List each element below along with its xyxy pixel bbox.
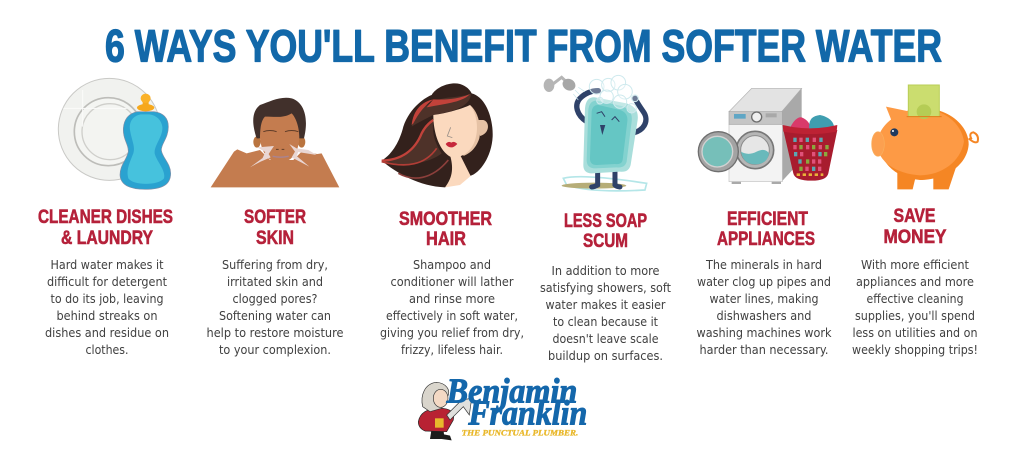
text block: water makes it easier <box>546 298 666 312</box>
text block: water lines, making <box>710 292 818 306</box>
text block <box>852 258 978 357</box>
text block: Shampoo and <box>413 258 491 272</box>
panel: less soap scum <box>540 75 671 363</box>
text block <box>540 264 671 363</box>
text block <box>696 258 832 357</box>
text block: frizzy, lifeless hair. <box>401 343 503 357</box>
heading <box>564 210 647 252</box>
text block: Suffering from dry, <box>222 258 328 272</box>
panel: smoother hair <box>380 83 524 357</box>
text block: buildup on surfaces. <box>548 349 663 363</box>
icon: Benjamin Franklin cartoon plumber <box>418 382 472 440</box>
heading: CLEANER DISHES <box>38 206 173 228</box>
text block: appliances and more <box>856 275 974 289</box>
text block: clothes. <box>86 343 128 357</box>
panel: save money <box>852 85 978 357</box>
heading: SOFTER <box>244 206 306 228</box>
text block: to do its job, leaving <box>50 292 164 306</box>
text block: to clean because it <box>553 315 658 329</box>
icon: man washing face <box>211 98 339 187</box>
text block: supplies, you'll spend <box>855 309 975 323</box>
logo: Benjamin Franklin The Punctual Plumber <box>418 372 587 440</box>
text block <box>45 258 169 357</box>
text block: and rinse more <box>409 292 495 306</box>
logo wordmark: THE PUNCTUAL PLUMBER. <box>462 428 578 438</box>
heading: MONEY <box>884 226 946 248</box>
text block: doesn't leave scale <box>552 332 658 346</box>
text block: dishes and residue on <box>45 326 169 340</box>
text block: conditioner will lather <box>390 275 514 289</box>
panel: cleaner dishes and laundry <box>38 78 173 357</box>
text block <box>380 258 524 357</box>
panel: efficient appliances <box>696 88 837 357</box>
text block: to your complexion. <box>219 343 331 357</box>
text block: irritated skin and <box>227 275 323 289</box>
icon: plate and dish soap bottle <box>58 78 171 189</box>
text block: dishwashers and <box>716 309 812 323</box>
logo wordmark: Benjamin <box>446 372 577 410</box>
text block: satisfying showers, soft <box>540 281 671 295</box>
heading <box>884 205 946 248</box>
text block <box>206 258 344 357</box>
text block: Hard water makes it <box>50 258 164 272</box>
logo wordmark <box>446 372 587 438</box>
logo wordmark: Franklin <box>467 394 587 432</box>
text block: With more efficient <box>861 258 969 272</box>
text block: washing machines work <box>696 326 832 340</box>
text block: harder than necessary. <box>700 343 828 357</box>
heading: SAVE <box>894 205 936 227</box>
text block: water clog up pipes and <box>697 275 831 289</box>
icon: washing machine and laundry basket <box>698 88 837 184</box>
text block: effectively in soft water, <box>386 309 518 323</box>
heading <box>399 208 492 250</box>
text block: behind streaks on <box>56 309 158 323</box>
heading: SKIN <box>256 227 294 249</box>
text block: weekly shopping trips! <box>852 343 978 357</box>
heading: EFFICIENT <box>727 208 808 230</box>
heading: LESS SOAP <box>564 210 647 232</box>
text block: difficult for detergent <box>47 275 167 289</box>
icon: piggy bank with banknote <box>872 85 978 189</box>
heading: SMOOTHER <box>399 208 492 230</box>
text block: Softening water can <box>219 309 331 323</box>
text block: effective cleaning <box>866 292 964 306</box>
text block: less on utilities and on <box>852 326 978 340</box>
icon: soap character in shower <box>544 75 647 191</box>
icon: woman with flowing hair <box>382 83 493 187</box>
heading: APPLIANCES <box>717 228 815 250</box>
text block: clogged pores? <box>232 292 318 306</box>
text block: The minerals in hard <box>705 258 822 272</box>
text block: In addition to more <box>552 264 660 278</box>
panel: softer skin <box>206 98 344 357</box>
heading: & LAUNDRY <box>61 227 153 249</box>
text block: help to restore moisture <box>206 326 344 340</box>
text block: giving you relief from dry, <box>380 326 524 340</box>
heading: SCUM <box>583 230 628 252</box>
heading <box>38 206 173 249</box>
heading <box>244 206 306 249</box>
heading <box>717 208 815 250</box>
heading: HAIR <box>426 228 466 250</box>
